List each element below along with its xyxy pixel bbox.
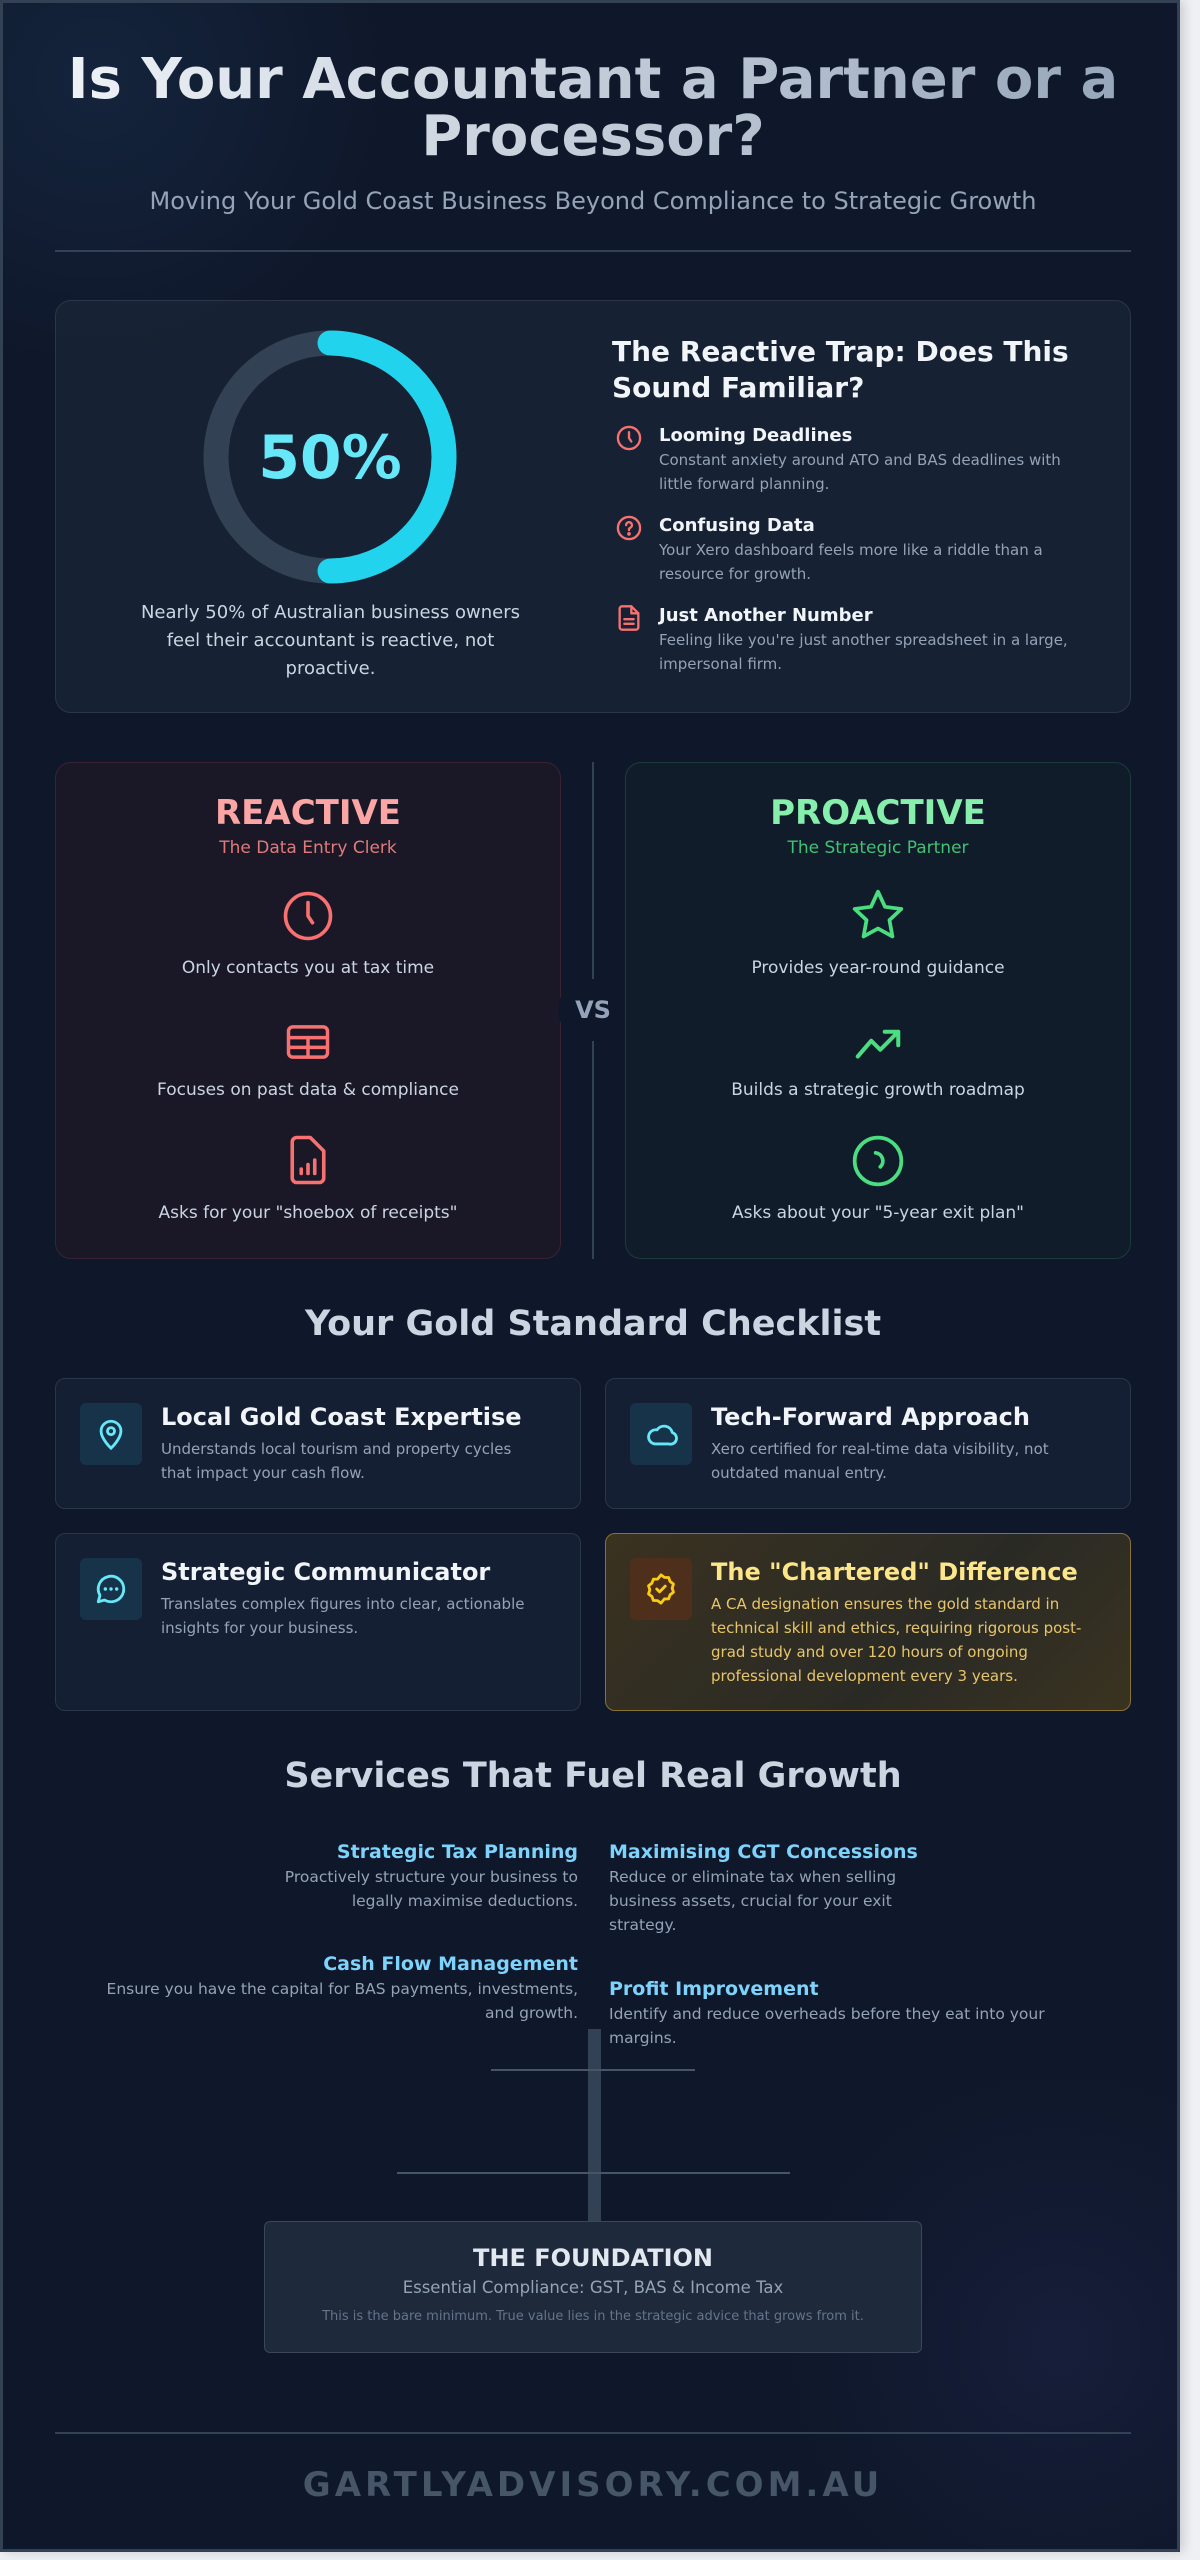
card: chartered difference: The "Chartered" Difference [711, 1558, 1078, 1586]
subtitle: Moving Your Gold Coast Business Beyond Compliance to Strategic Growth [150, 187, 1036, 215]
foundation box: This is the bare minimum. True value lies in the strategic advice that grows from it. [322, 2309, 864, 2324]
icon: table [286, 1025, 330, 1059]
panel: proactive [625, 762, 1131, 1259]
item: confusing data: Your Xero dashboard feels more like a riddle than a resource for growth. [659, 541, 1043, 583]
panel: reactive: Only contacts you at tax time [182, 958, 434, 978]
donut caption: Nearly 50% of Australian business owners feel their accountant is reactive, not proactive. [141, 602, 520, 679]
card: tech-forward: Xero certified for real-time data visibility, not outdated manual entry. [711, 1440, 1049, 1482]
heading: reactive trap: The Reactive Trap: Does This Sound Familiar? [612, 335, 1069, 404]
item: looming deadlines [616, 425, 1061, 493]
service: cash flow [107, 1953, 578, 2022]
service: cgt concessions: Reduce or eliminate tax when selling business assets, crucial for your exit strategy. [609, 1868, 896, 1934]
foundation box [264, 2221, 922, 2353]
card: tech-forward: Tech-Forward Approach [711, 1403, 1030, 1431]
icon: circle progress [852, 1136, 904, 1186]
card: local expertise [55, 1378, 581, 1509]
heading: services: Services That Fuel Real Growth [284, 1756, 902, 1796]
card: local expertise: Local Gold Coast Expertise [161, 1403, 522, 1431]
foundation box: Essential Compliance: GST, BAS & Income Tax [403, 2278, 783, 2297]
panel: reactive: REACTIVE [215, 793, 401, 833]
item: confusing data [616, 515, 1043, 583]
panel: reactive trap [55, 300, 1131, 713]
panel: reactive: The Data Entry Clerk [219, 838, 397, 858]
foundation box: THE FOUNDATION [473, 2244, 713, 2272]
item: just another number: Just Another Number [659, 605, 873, 626]
icon: star [852, 890, 904, 938]
item: just another number [618, 605, 1068, 673]
service: profit improvement: Profit Improvement [609, 1978, 819, 2000]
icon: clock [284, 892, 332, 940]
heading: checklist: Your Gold Standard Checklist [305, 1304, 881, 1344]
item: just another number: Feeling like you're just another spreadsheet in a large, impersonal firm. [659, 631, 1068, 673]
footer: website: GARTLYADVISORY.COM.AU [303, 2465, 883, 2505]
service: strategic tax planning: Strategic Tax Planning [337, 1841, 578, 1863]
panel: reactive: Focuses on past data & compliance [157, 1080, 459, 1100]
service: profit improvement: Identify and reduce overheads before they eat into your margins. [609, 2005, 1045, 2047]
donut chart: 50%: 50% [258, 423, 402, 493]
item: looming deadlines: Constant anxiety around ATO and BAS deadlines with little forward planning. [659, 451, 1061, 493]
title: Is Your Accountant a Partner or a Processor? [68, 47, 1118, 169]
panel: reactive: Asks for your "shoebox of receipts" [158, 1203, 457, 1223]
panel: reactive [55, 762, 561, 1259]
icon: trending up [856, 1030, 900, 1059]
service: profit improvement [609, 1978, 1045, 2047]
service: cash flow: Ensure you have the capital for BAS payments, investments, and growth. [107, 1980, 578, 2022]
donut chart: 50% [204, 330, 456, 584]
card: local expertise: Understands local tourism and property cycles that impact your cash flow. [161, 1440, 511, 1482]
service: strategic tax planning [285, 1841, 578, 1910]
card: communicator: Strategic Communicator [161, 1558, 490, 1586]
panel: proactive: Asks about your "5-year exit plan" [732, 1203, 1024, 1223]
service: cgt concessions: Maximising CGT Concessions [609, 1841, 918, 1863]
service: cgt concessions [609, 1841, 918, 1934]
card: tech-forward [605, 1378, 1131, 1509]
vs badge: VS [575, 996, 611, 1024]
panel: proactive: Provides year-round guidance [751, 958, 1005, 978]
tree: trunk and branches [397, 2029, 790, 2221]
panel: proactive: Builds a strategic growth roadmap [731, 1080, 1025, 1100]
card: chartered difference: A CA designation ensures the gold standard in technical skill and ethics, requiring rigorous post-grad study and over 120 hours of ongoing professional development every 3 years. [711, 1595, 1081, 1685]
card: chartered difference [605, 1533, 1131, 1711]
card: communicator [55, 1533, 581, 1711]
vs badge [558, 979, 628, 1041]
item: confusing data: Confusing Data [659, 515, 815, 536]
service: cash flow: Cash Flow Management [323, 1953, 578, 1975]
card: communicator: Translates complex figures into clear, actionable insights for your business. [161, 1595, 524, 1637]
item: looming deadlines: Looming Deadlines [659, 425, 852, 446]
panel: proactive: The Strategic Partner [787, 838, 969, 858]
icon: file chart [290, 1136, 326, 1184]
service: strategic tax planning: Proactively structure your business to legally maximise deductions. [285, 1868, 578, 1910]
panel: proactive: PROACTIVE [770, 793, 986, 833]
